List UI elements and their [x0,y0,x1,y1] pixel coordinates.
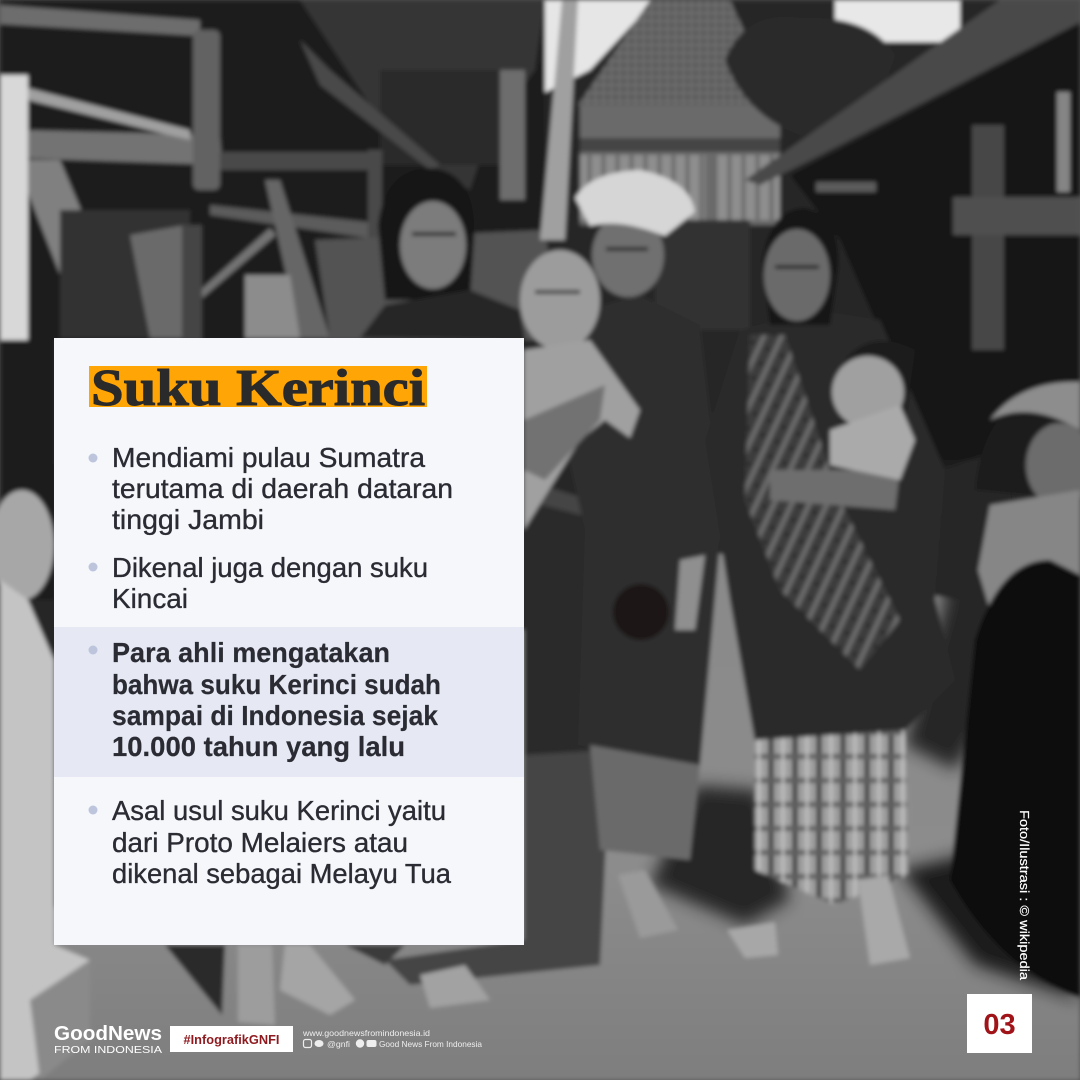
bullet 2: Dikenal juga dengan suku [112,552,428,583]
bullet 1 [88,442,453,535]
logo: GoodNews from Indonesia: FROM INDONESIA [54,1044,162,1056]
long dark dress left figure [385,480,610,985]
bullet 3: highlighted: 10.000 tahun yang lalu [112,731,405,762]
shade right of woman [905,470,1000,770]
bullet 3: highlighted: sampai di Indonesia sejak [112,700,439,731]
left house [0,0,545,375]
pole [540,0,578,240]
middle ground [315,230,560,340]
bullet 1: tinggi Jambi [112,504,264,535]
bullet 1: terutama di daerah dataran [112,473,453,504]
bullet 3: highlighted [88,637,441,762]
logo: GoodNews from Indonesia [54,1023,162,1056]
website and social handles: @gnfi [327,1039,350,1049]
panel: text card [54,338,524,945]
website and social handles [302,1028,482,1049]
title: Suku Kerinci [91,360,425,417]
feet under panel [238,945,275,1025]
logo: GoodNews from Indonesia: GoodNews [54,1023,162,1045]
ground shadows [650,785,790,925]
hashtag badge: #InfografikGNFI [184,1032,280,1047]
website and social handles: Good News From Indonesia [379,1039,482,1049]
hashtag badge [170,1026,293,1052]
bullet 3: highlighted: Para ahli mengatakan [112,637,390,668]
sky [535,0,655,95]
page number box: 03 [983,1009,1016,1041]
bullet 1: Mendiami pulau Sumatra [112,442,426,473]
bullet 4 [88,795,452,889]
bullet 4: dari Proto Melaiers atau [112,827,408,858]
child right [950,382,1080,998]
photo credit: Foto/Ilustrasi : © wikipedia [1017,810,1032,981]
tree [725,17,895,135]
icon: youtube [366,1040,376,1047]
bullet 4: Asal usul suku Kerinci yaitu [112,795,446,826]
page number box [967,994,1032,1053]
bullet 2: Kincai [112,583,188,614]
woman right holding baby [705,208,955,965]
website and social handles: www.goodnewsfromindonesia.id [302,1028,430,1038]
right house [745,0,1080,470]
icon: instagram [304,1040,312,1048]
child left edge [0,454,90,1080]
bullet 4: dikenal sebagai Melayu Tua [112,858,452,889]
central thatched house [578,0,780,330]
baby held by girl [520,250,640,530]
girl with turban [560,170,722,938]
bullet 3: highlighted: bahwa suku Kerinci sudah [112,669,441,700]
woman left [360,168,525,340]
icon: facebook [356,1039,364,1048]
ground [0,550,1080,1080]
bullet 2 [88,552,428,614]
highlighted row [54,627,524,777]
icon: twitter [314,1040,324,1047]
